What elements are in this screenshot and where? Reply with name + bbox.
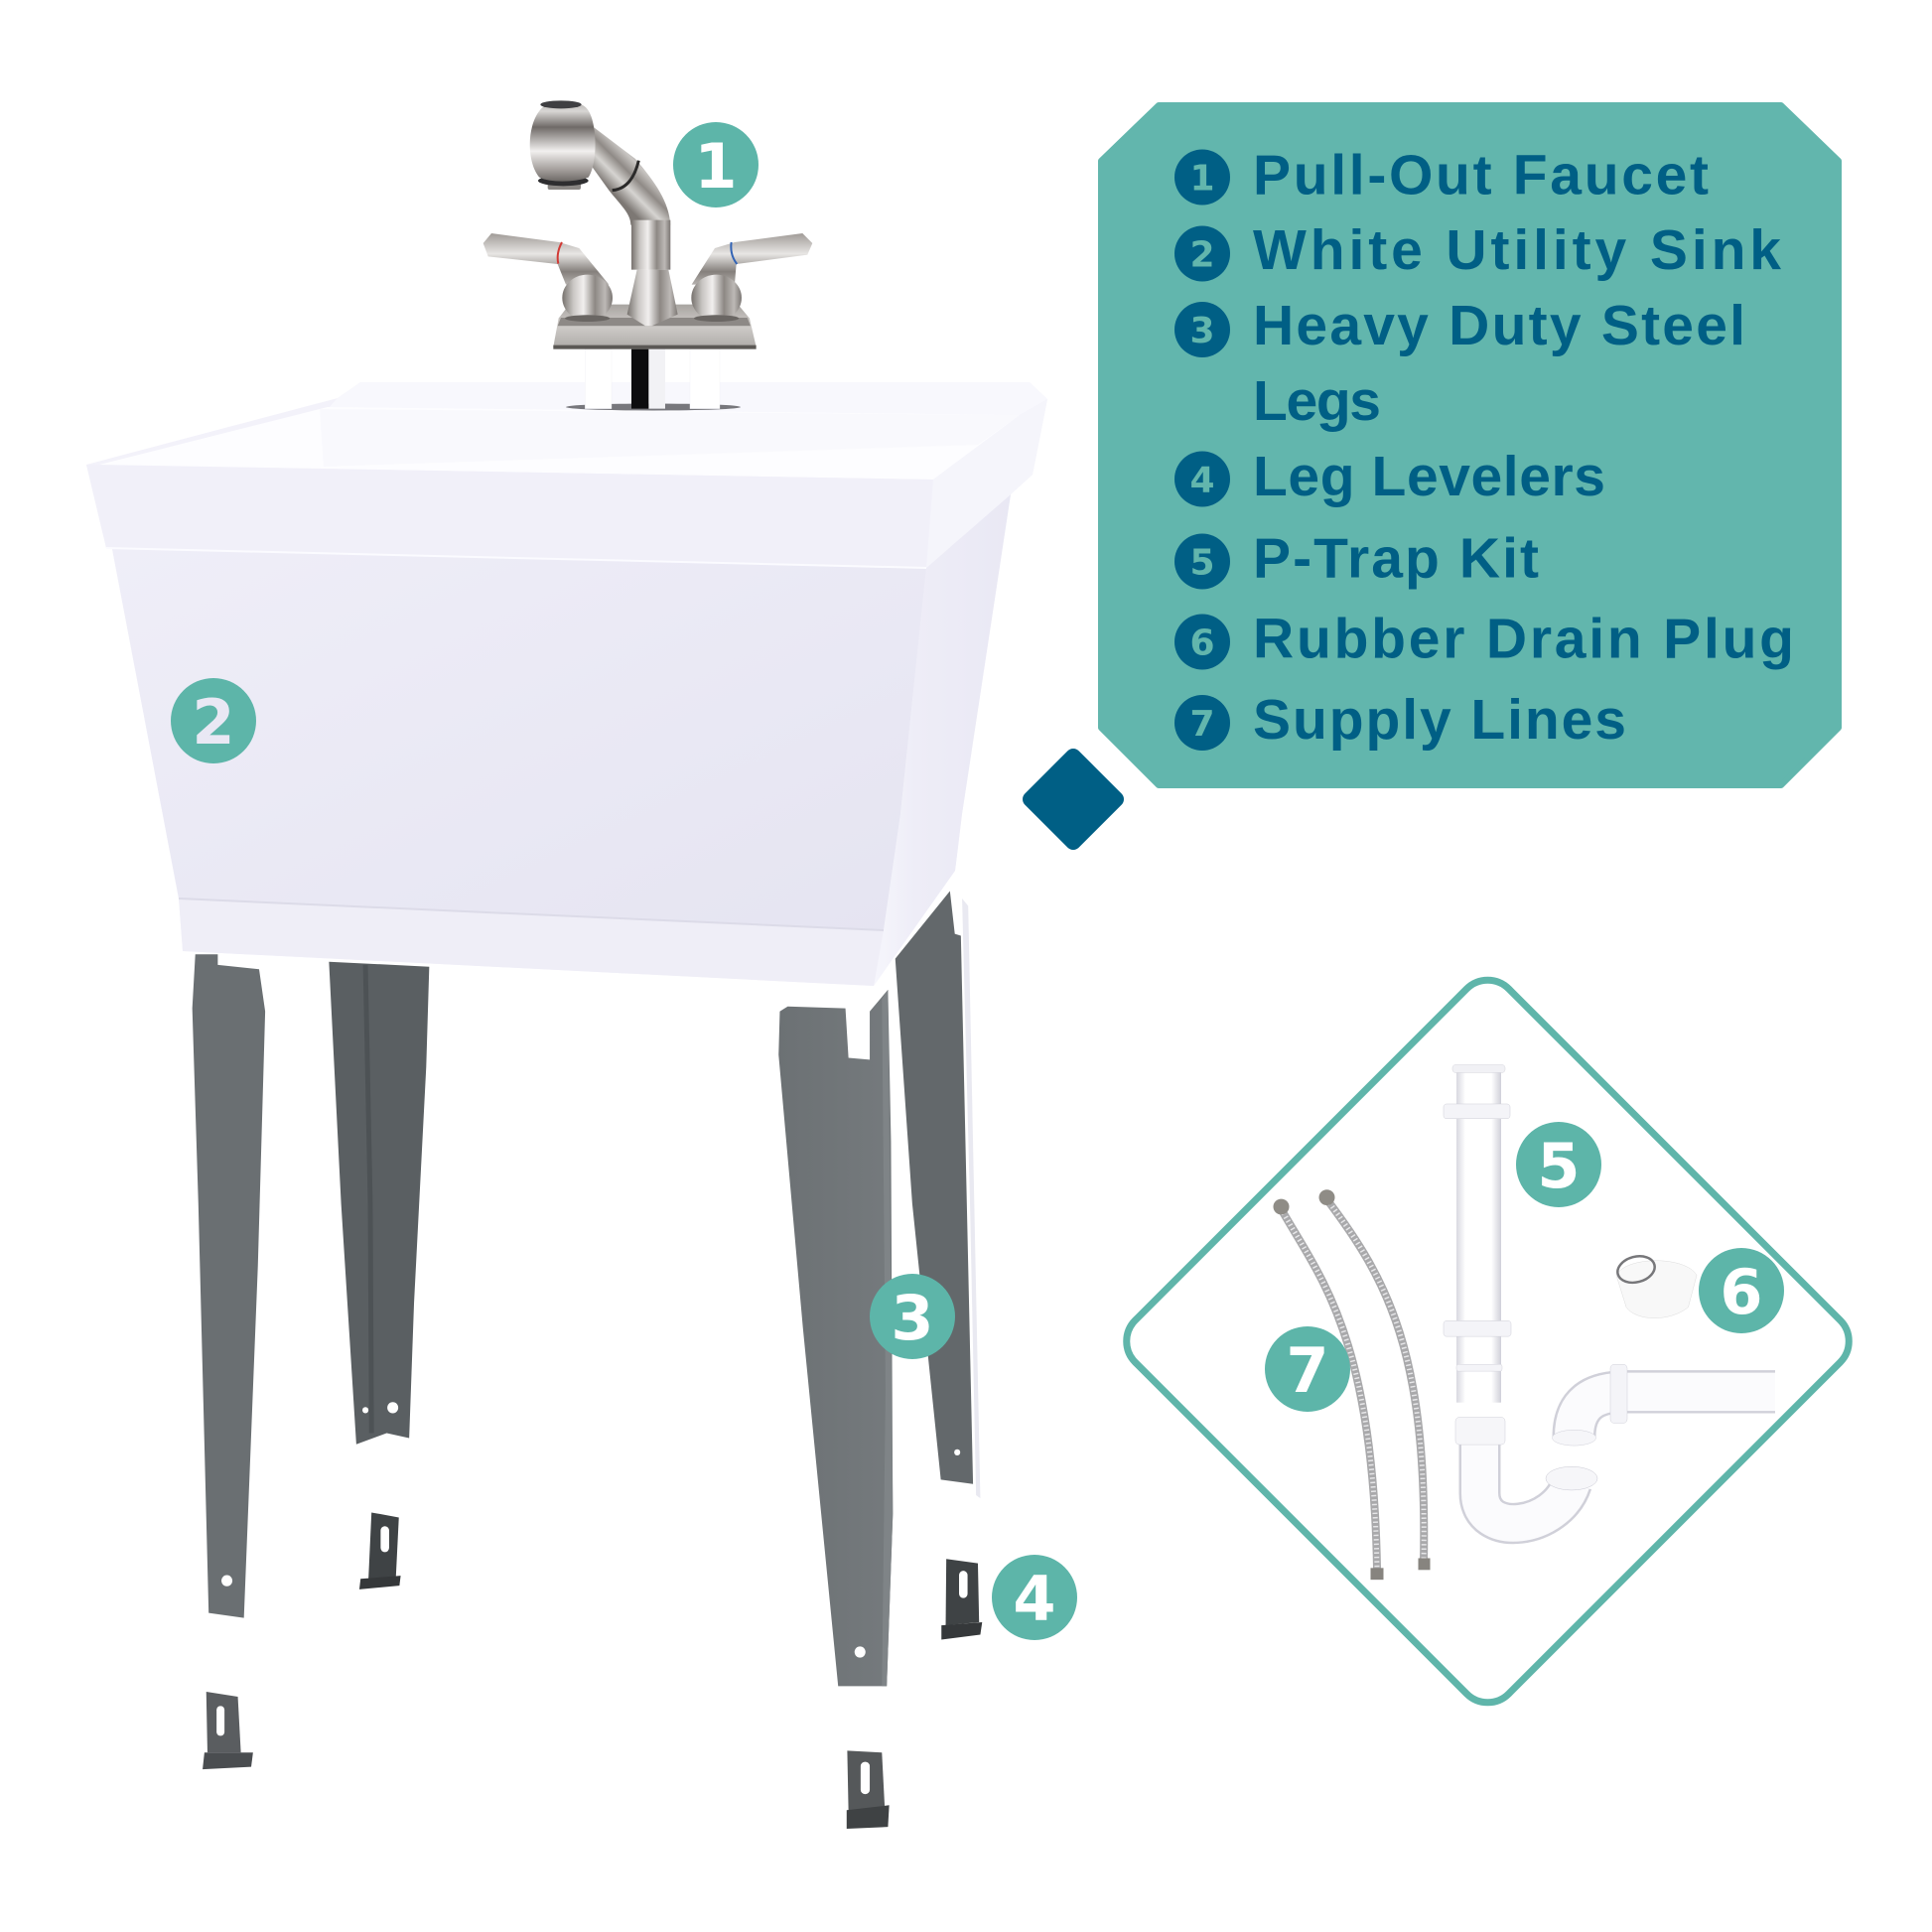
callout 4: 4 bbox=[1013, 1563, 1056, 1635]
list item 6: Rubber Drain Plug bbox=[1253, 608, 1794, 671]
small accent diamond bbox=[1020, 746, 1127, 853]
list item 2: 2 bbox=[1189, 234, 1215, 276]
list item 3: Heavy Duty Steel bbox=[1253, 294, 1745, 357]
callout 7 bbox=[1265, 1326, 1350, 1412]
sink tub bbox=[86, 382, 1047, 986]
callout 7: 7 bbox=[1286, 1334, 1329, 1407]
callout 6: 6 bbox=[1720, 1256, 1763, 1328]
list item 3 bbox=[1174, 294, 1745, 433]
icon: leveler front left bbox=[203, 1692, 253, 1769]
callout 5 bbox=[1516, 1122, 1601, 1207]
list item 3: Legs bbox=[1253, 369, 1381, 433]
icon: leveler front right bbox=[847, 1750, 890, 1829]
list item 1: 1 bbox=[1189, 159, 1215, 199]
icon: leveler back right bbox=[941, 1559, 982, 1640]
list item 3: 3 bbox=[1189, 311, 1215, 351]
callout 6 bbox=[1699, 1248, 1784, 1333]
list item 6: 6 bbox=[1189, 623, 1215, 663]
steel legs bbox=[193, 892, 982, 1829]
list item 4: 4 bbox=[1189, 461, 1215, 500]
icon: p-trap tailpiece bbox=[1444, 1065, 1511, 1403]
list item 2: White Utility Sink bbox=[1253, 218, 1781, 282]
leg: front right bbox=[778, 990, 893, 1686]
icon: pull-out faucet bbox=[483, 100, 812, 409]
callout 3: 3 bbox=[891, 1282, 934, 1354]
list item 1: Pull-Out Faucet bbox=[1253, 143, 1709, 207]
list item 7: 7 bbox=[1189, 704, 1215, 745]
icon: supply lines bbox=[1273, 1189, 1430, 1580]
leg: back right bbox=[896, 892, 980, 1498]
callout 2 bbox=[171, 678, 256, 763]
leg: back left bbox=[329, 962, 429, 1445]
leg: front left bbox=[193, 954, 265, 1618]
list item 4: Leg Levelers bbox=[1253, 445, 1605, 508]
icon: leveler back left bbox=[359, 1512, 401, 1589]
icon: p-trap elbow bbox=[1553, 1364, 1775, 1446]
list item 7: Supply Lines bbox=[1253, 688, 1626, 752]
callout 4 bbox=[992, 1555, 1077, 1640]
list item 5: 5 bbox=[1189, 542, 1215, 584]
parts list panel bbox=[1101, 105, 1839, 785]
icon: p-trap bend bbox=[1455, 1417, 1597, 1523]
list item 5: P-Trap Kit bbox=[1253, 526, 1539, 590]
callout 1: 1 bbox=[694, 130, 738, 203]
icon: rubber drain plug bbox=[1614, 1252, 1697, 1318]
callout 3 bbox=[870, 1274, 955, 1359]
accessories diamond outline bbox=[1114, 968, 1862, 1715]
accessories parts bbox=[1273, 1065, 1775, 1580]
callout 5: 5 bbox=[1537, 1130, 1581, 1202]
callout 1 bbox=[673, 122, 759, 207]
callout 2: 2 bbox=[192, 686, 235, 759]
